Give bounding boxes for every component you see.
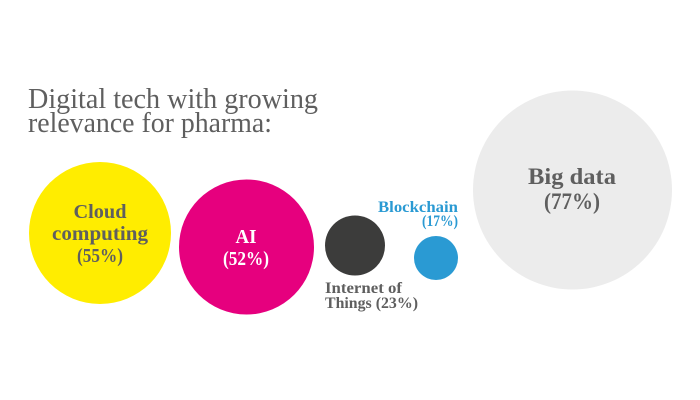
bubble: cloud computing: (55%) — [77, 245, 123, 267]
bubble: big data: (77%) — [544, 189, 600, 214]
bubble: big data: Big data — [528, 164, 617, 189]
bubble: cloud computing: computing — [52, 223, 148, 245]
bubble: AI: (52%) — [223, 248, 269, 270]
bubble: cloud computing: Cloud — [74, 201, 126, 223]
bubble: AI: AI — [236, 226, 257, 248]
bubble: big data — [473, 90, 672, 290]
bubble: blockchain: (17%) — [422, 213, 458, 230]
title: Digital tech with growing — [28, 83, 318, 115]
bubble: AI — [179, 180, 314, 314]
bubble: internet of things — [325, 216, 418, 312]
title: relevance for pharma: — [28, 107, 272, 139]
bubble: internet of things: Things (23%) — [325, 295, 418, 312]
title — [28, 83, 318, 139]
bubble: internet of things: Internet of — [325, 280, 403, 297]
bubble: blockchain — [378, 199, 458, 280]
bubble: blockchain: Blockchain — [378, 199, 458, 216]
bubble: cloud computing — [29, 162, 171, 304]
